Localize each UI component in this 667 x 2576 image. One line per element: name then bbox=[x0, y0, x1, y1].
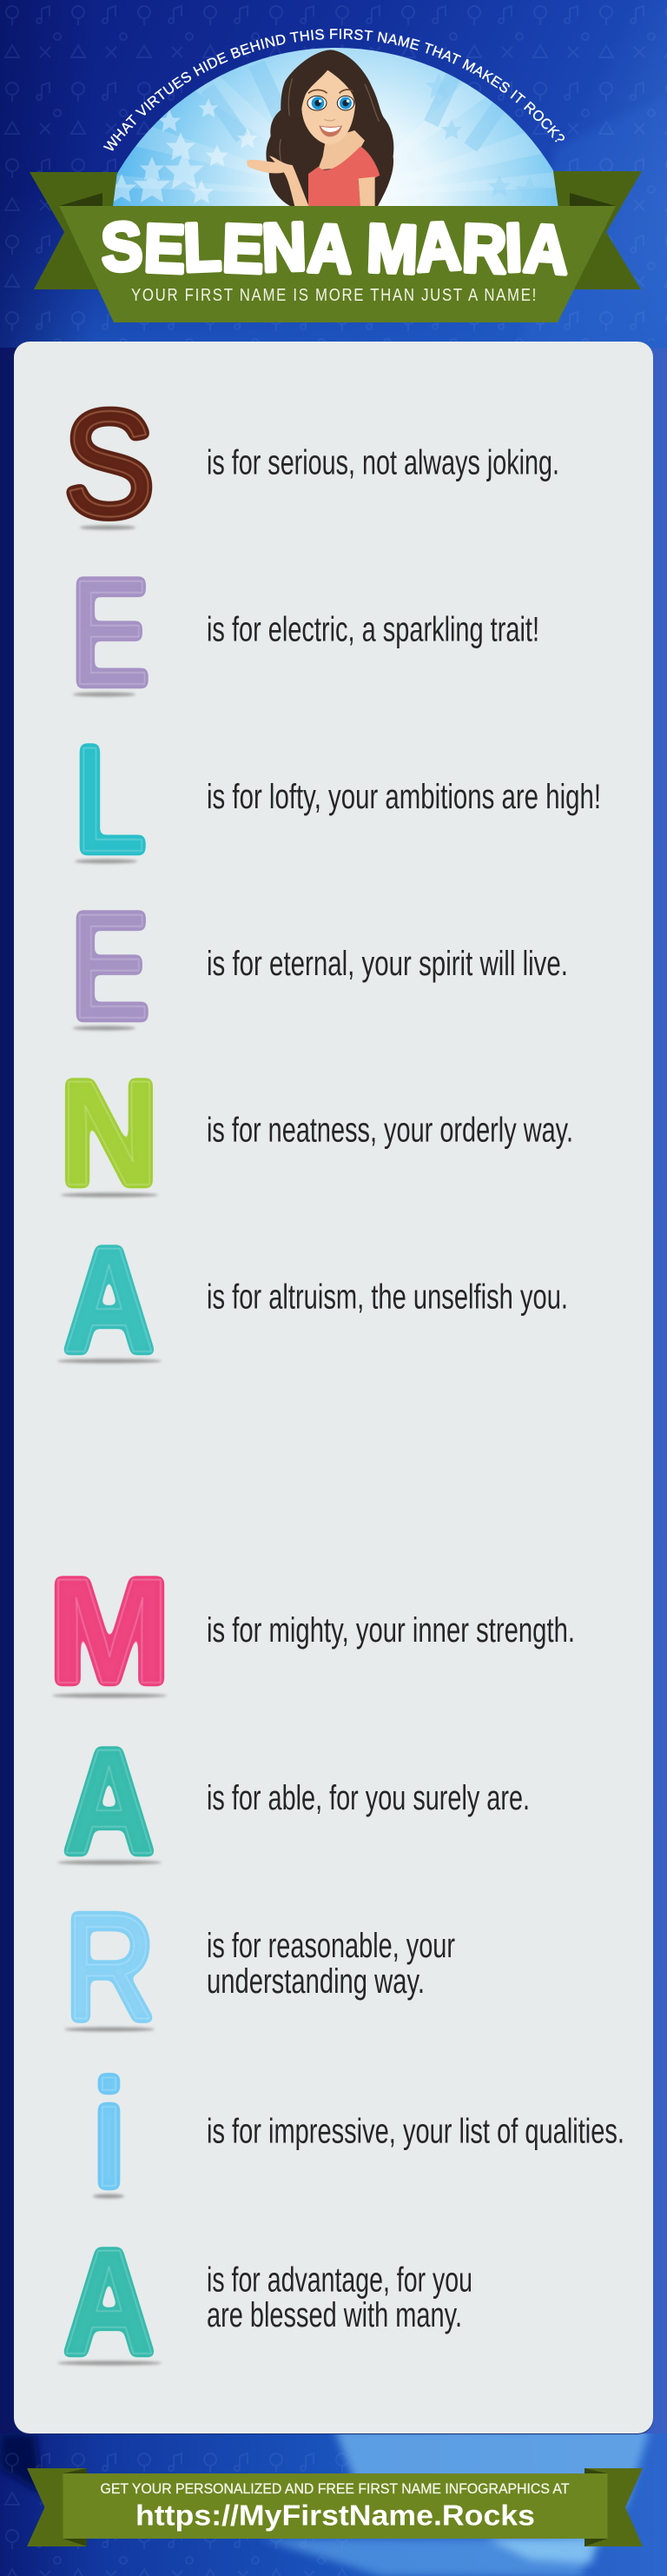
row: A: A bbox=[63, 2219, 155, 2386]
row: I bbox=[92, 2051, 624, 2218]
hair bbox=[266, 50, 393, 209]
row: R: understanding way. bbox=[207, 1962, 425, 2001]
face bbox=[301, 70, 355, 145]
row: L: L bbox=[73, 716, 146, 883]
row: A: A bbox=[63, 1217, 155, 1384]
row: R: R bbox=[64, 1883, 155, 2050]
row: S: S bbox=[63, 380, 155, 548]
row: N: N bbox=[59, 1050, 159, 1217]
row: E bbox=[70, 549, 539, 717]
footer folds bbox=[63, 2468, 87, 2473]
neck and chest bbox=[318, 130, 365, 169]
footer left tail bbox=[27, 2468, 87, 2546]
row: A: A bbox=[63, 1217, 155, 1384]
row: R: R bbox=[64, 1883, 155, 2050]
right ribbon tail bbox=[553, 171, 642, 289]
footer ribbon bbox=[27, 2468, 643, 2546]
footer band bbox=[63, 2473, 608, 2539]
row: A: are blessed with many. bbox=[207, 2296, 462, 2334]
row: E bbox=[70, 883, 568, 1051]
row: A: A bbox=[63, 2219, 155, 2386]
title: SELENA MARIA bbox=[99, 207, 571, 289]
footer right tail bbox=[584, 2468, 643, 2546]
row: E: E bbox=[70, 883, 149, 1051]
row: A: is for advantage, for you bbox=[207, 2261, 472, 2300]
icon: cartoon woman bbox=[247, 50, 393, 209]
main ribbon bbox=[59, 206, 616, 322]
row: I: i bbox=[92, 2051, 126, 2218]
row: R: is for reasonable, your bbox=[207, 1927, 455, 1965]
row: L bbox=[73, 716, 601, 883]
row: S bbox=[63, 380, 559, 548]
eyes bbox=[307, 96, 327, 110]
shirt bbox=[308, 146, 380, 209]
row: E: E bbox=[70, 549, 149, 717]
row: N: N bbox=[59, 1050, 159, 1217]
row: A bbox=[57, 1718, 530, 1885]
row: A: is for able, for you surely are. bbox=[207, 1779, 530, 1817]
row: M bbox=[49, 1548, 575, 1715]
sleeve arm bbox=[359, 176, 375, 209]
row: A: A bbox=[63, 1718, 155, 1885]
row: E: E bbox=[70, 883, 149, 1051]
row: E: is for electric, a sparkling trait! bbox=[207, 610, 539, 648]
row: S: S bbox=[63, 380, 155, 548]
footer url: https://MyFirstName.Rocks bbox=[135, 2500, 535, 2531]
row: M: M bbox=[49, 1548, 170, 1715]
row: E: E bbox=[70, 549, 149, 717]
header ribbon bbox=[30, 171, 642, 322]
ribbon folds bbox=[59, 193, 102, 206]
curved tagline: WHAT VIRTUES HIDE BEHIND THIS FIRST NAME THAT MAKES IT ROCK? bbox=[102, 29, 565, 151]
row: I: i bbox=[92, 2051, 126, 2218]
row: R bbox=[64, 1883, 455, 2050]
row: M: M bbox=[49, 1548, 170, 1715]
header dome with starburst bbox=[113, 48, 558, 206]
row: L: L bbox=[73, 716, 146, 883]
row: A bbox=[57, 2219, 472, 2386]
footer call to action: GET YOUR PERSONALIZED AND FREE FIRST NAME INFOGRAPHICS AT bbox=[101, 2481, 570, 2497]
row: N bbox=[59, 1050, 573, 1217]
mouth bbox=[324, 119, 335, 121]
row: A bbox=[57, 1217, 568, 1384]
subtitle: YOUR FIRST NAME IS MORE THAN JUST A NAME! bbox=[131, 286, 538, 305]
row: A: A bbox=[63, 1718, 155, 1885]
left ribbon tail bbox=[30, 172, 117, 289]
panel: letters bbox=[14, 342, 653, 2434]
hand and forearm bbox=[247, 156, 310, 209]
